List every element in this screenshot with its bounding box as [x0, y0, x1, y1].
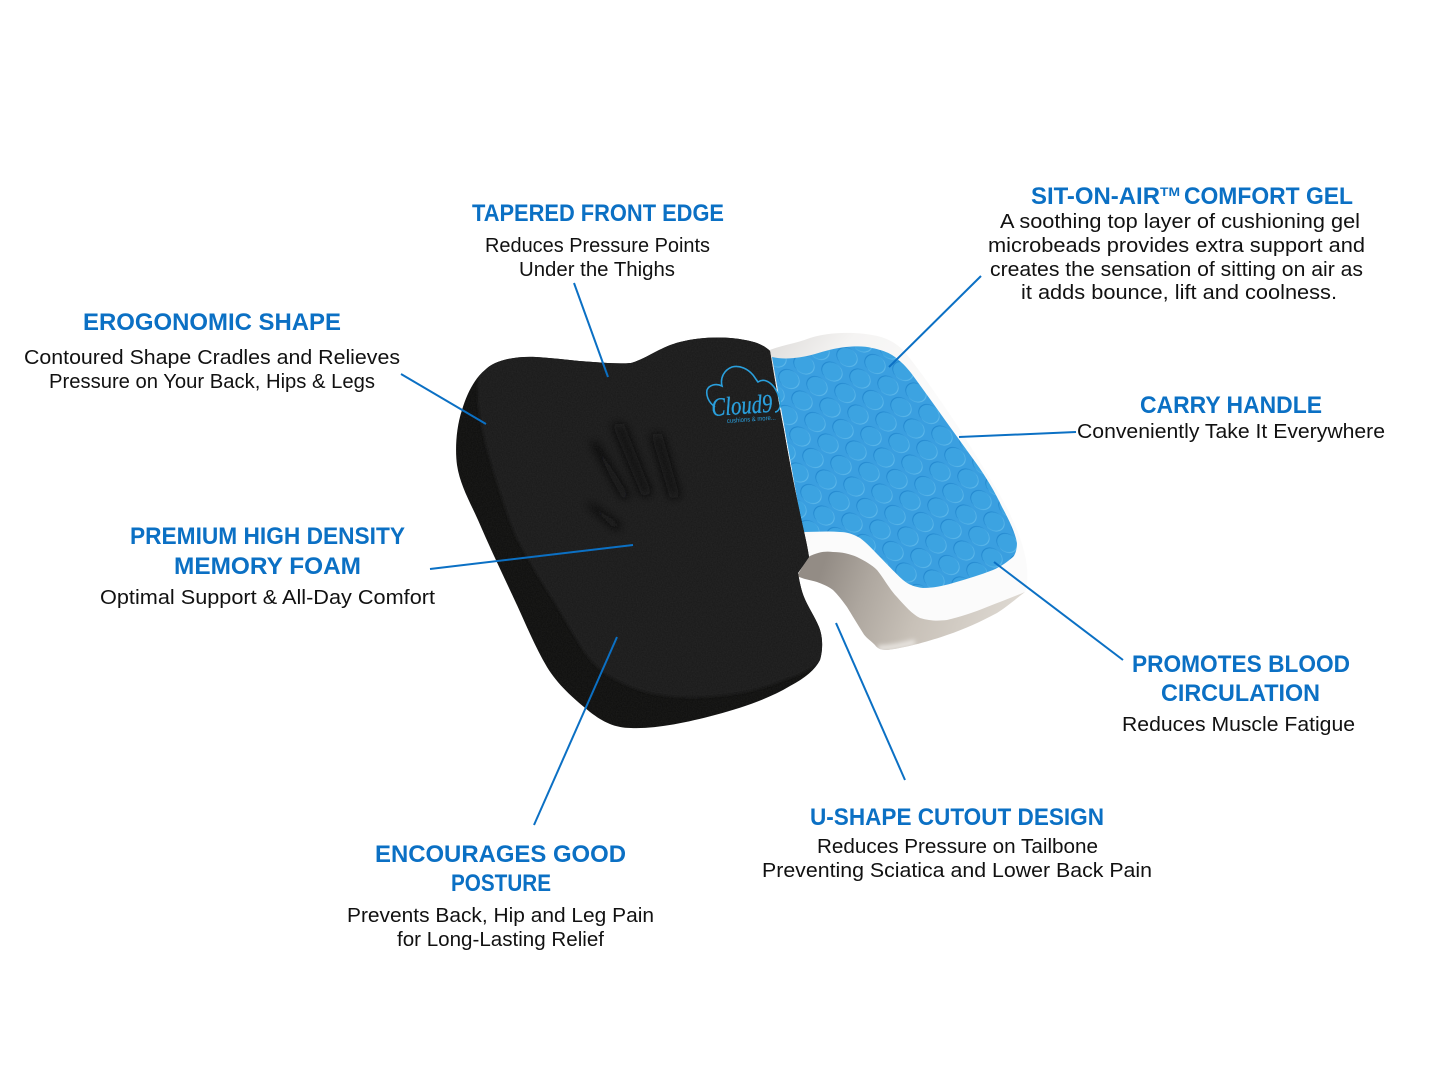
heading: TM: [1160, 185, 1180, 199]
callout: u-shape cutout design: [762, 623, 1152, 882]
leader line: [430, 545, 633, 569]
black cushion top surface: [478, 325, 830, 697]
description: Reduces Muscle Fatigue: [1122, 714, 1355, 736]
heading: CIRCULATION: [1161, 680, 1320, 707]
description: Reduces Pressure Points: [485, 235, 710, 257]
description: Pressure on Your Back, Hips & Legs: [49, 371, 375, 393]
description: Reduces Pressure on Tailbone: [817, 836, 1098, 858]
description: [24, 347, 400, 393]
blue cooling gel layer with microbead dots: [772, 346, 1017, 588]
handprint impression: [585, 424, 680, 530]
heading: EROGONOMIC SHAPE: [83, 309, 341, 336]
product: gel memory foam seat cushion: [456, 325, 1030, 728]
description: A soothing top layer of cushioning gel: [1000, 211, 1360, 233]
description: [762, 836, 1152, 882]
description: creates the sensation of sitting on air as: [990, 259, 1363, 281]
Cloud9 logo: Cloud9: [710, 389, 773, 422]
description: Optimal Support & All-Day Comfort: [100, 587, 435, 609]
leader line: [534, 637, 617, 825]
leader line: [959, 432, 1076, 437]
Cloud9 logo: [707, 366, 780, 425]
foam front side face: [798, 552, 1024, 650]
description: Prevents Back, Hip and Leg Pain: [347, 905, 654, 927]
callout: ergonomic shape: [24, 309, 486, 424]
callout: encourages good posture: [347, 637, 654, 951]
description: Under the Thighs: [519, 259, 675, 281]
heading: POSTURE: [451, 870, 551, 897]
description: for Long-Lasting Relief: [397, 929, 604, 951]
heading: PROMOTES BLOOD: [1132, 651, 1350, 678]
description: Preventing Sciatica and Lower Back Pain: [762, 860, 1152, 882]
heading: ENCOURAGES GOOD: [375, 841, 626, 868]
heading: [1132, 651, 1350, 707]
description: [485, 235, 710, 281]
callout: promotes blood circulation: [994, 562, 1355, 736]
heading: CARRY HANDLE: [1140, 392, 1322, 419]
description: it adds bounce, lift and coolness.: [1021, 282, 1337, 304]
heading: [1031, 183, 1353, 210]
callout: sit-on-air comfort gel: [889, 183, 1365, 367]
black memory foam cover: [456, 338, 822, 728]
description: [347, 905, 654, 951]
heading: MEMORY FOAM: [174, 553, 361, 580]
Cloud9 logo: cushions & more...: [727, 415, 776, 425]
heading: [375, 841, 626, 897]
description: Contoured Shape Cradles and Relieves: [24, 347, 400, 369]
callout: tapered front edge: [472, 200, 724, 377]
heading: COMFORT GEL: [1184, 183, 1353, 210]
description: microbeads provides extra support and: [988, 235, 1365, 257]
leader line: [574, 283, 608, 377]
description: [988, 211, 1365, 304]
heading: [130, 523, 405, 580]
description: Conveniently Take It Everywhere: [1077, 421, 1385, 443]
white foam base: [765, 333, 1030, 655]
callout: premium high density memory foam: [100, 523, 633, 609]
leader line: [836, 623, 905, 780]
heading: TAPERED FRONT EDGE: [472, 200, 724, 227]
heading: U-SHAPE CUTOUT DESIGN: [810, 804, 1104, 831]
fabric grain texture: [456, 338, 822, 728]
leader line: [889, 276, 981, 367]
leader line: [994, 562, 1123, 660]
callout: carry handle: [959, 392, 1385, 443]
leader line: [401, 374, 486, 424]
heading: PREMIUM HIGH DENSITY: [130, 523, 405, 550]
heading: SIT-ON-AIR: [1031, 183, 1160, 210]
